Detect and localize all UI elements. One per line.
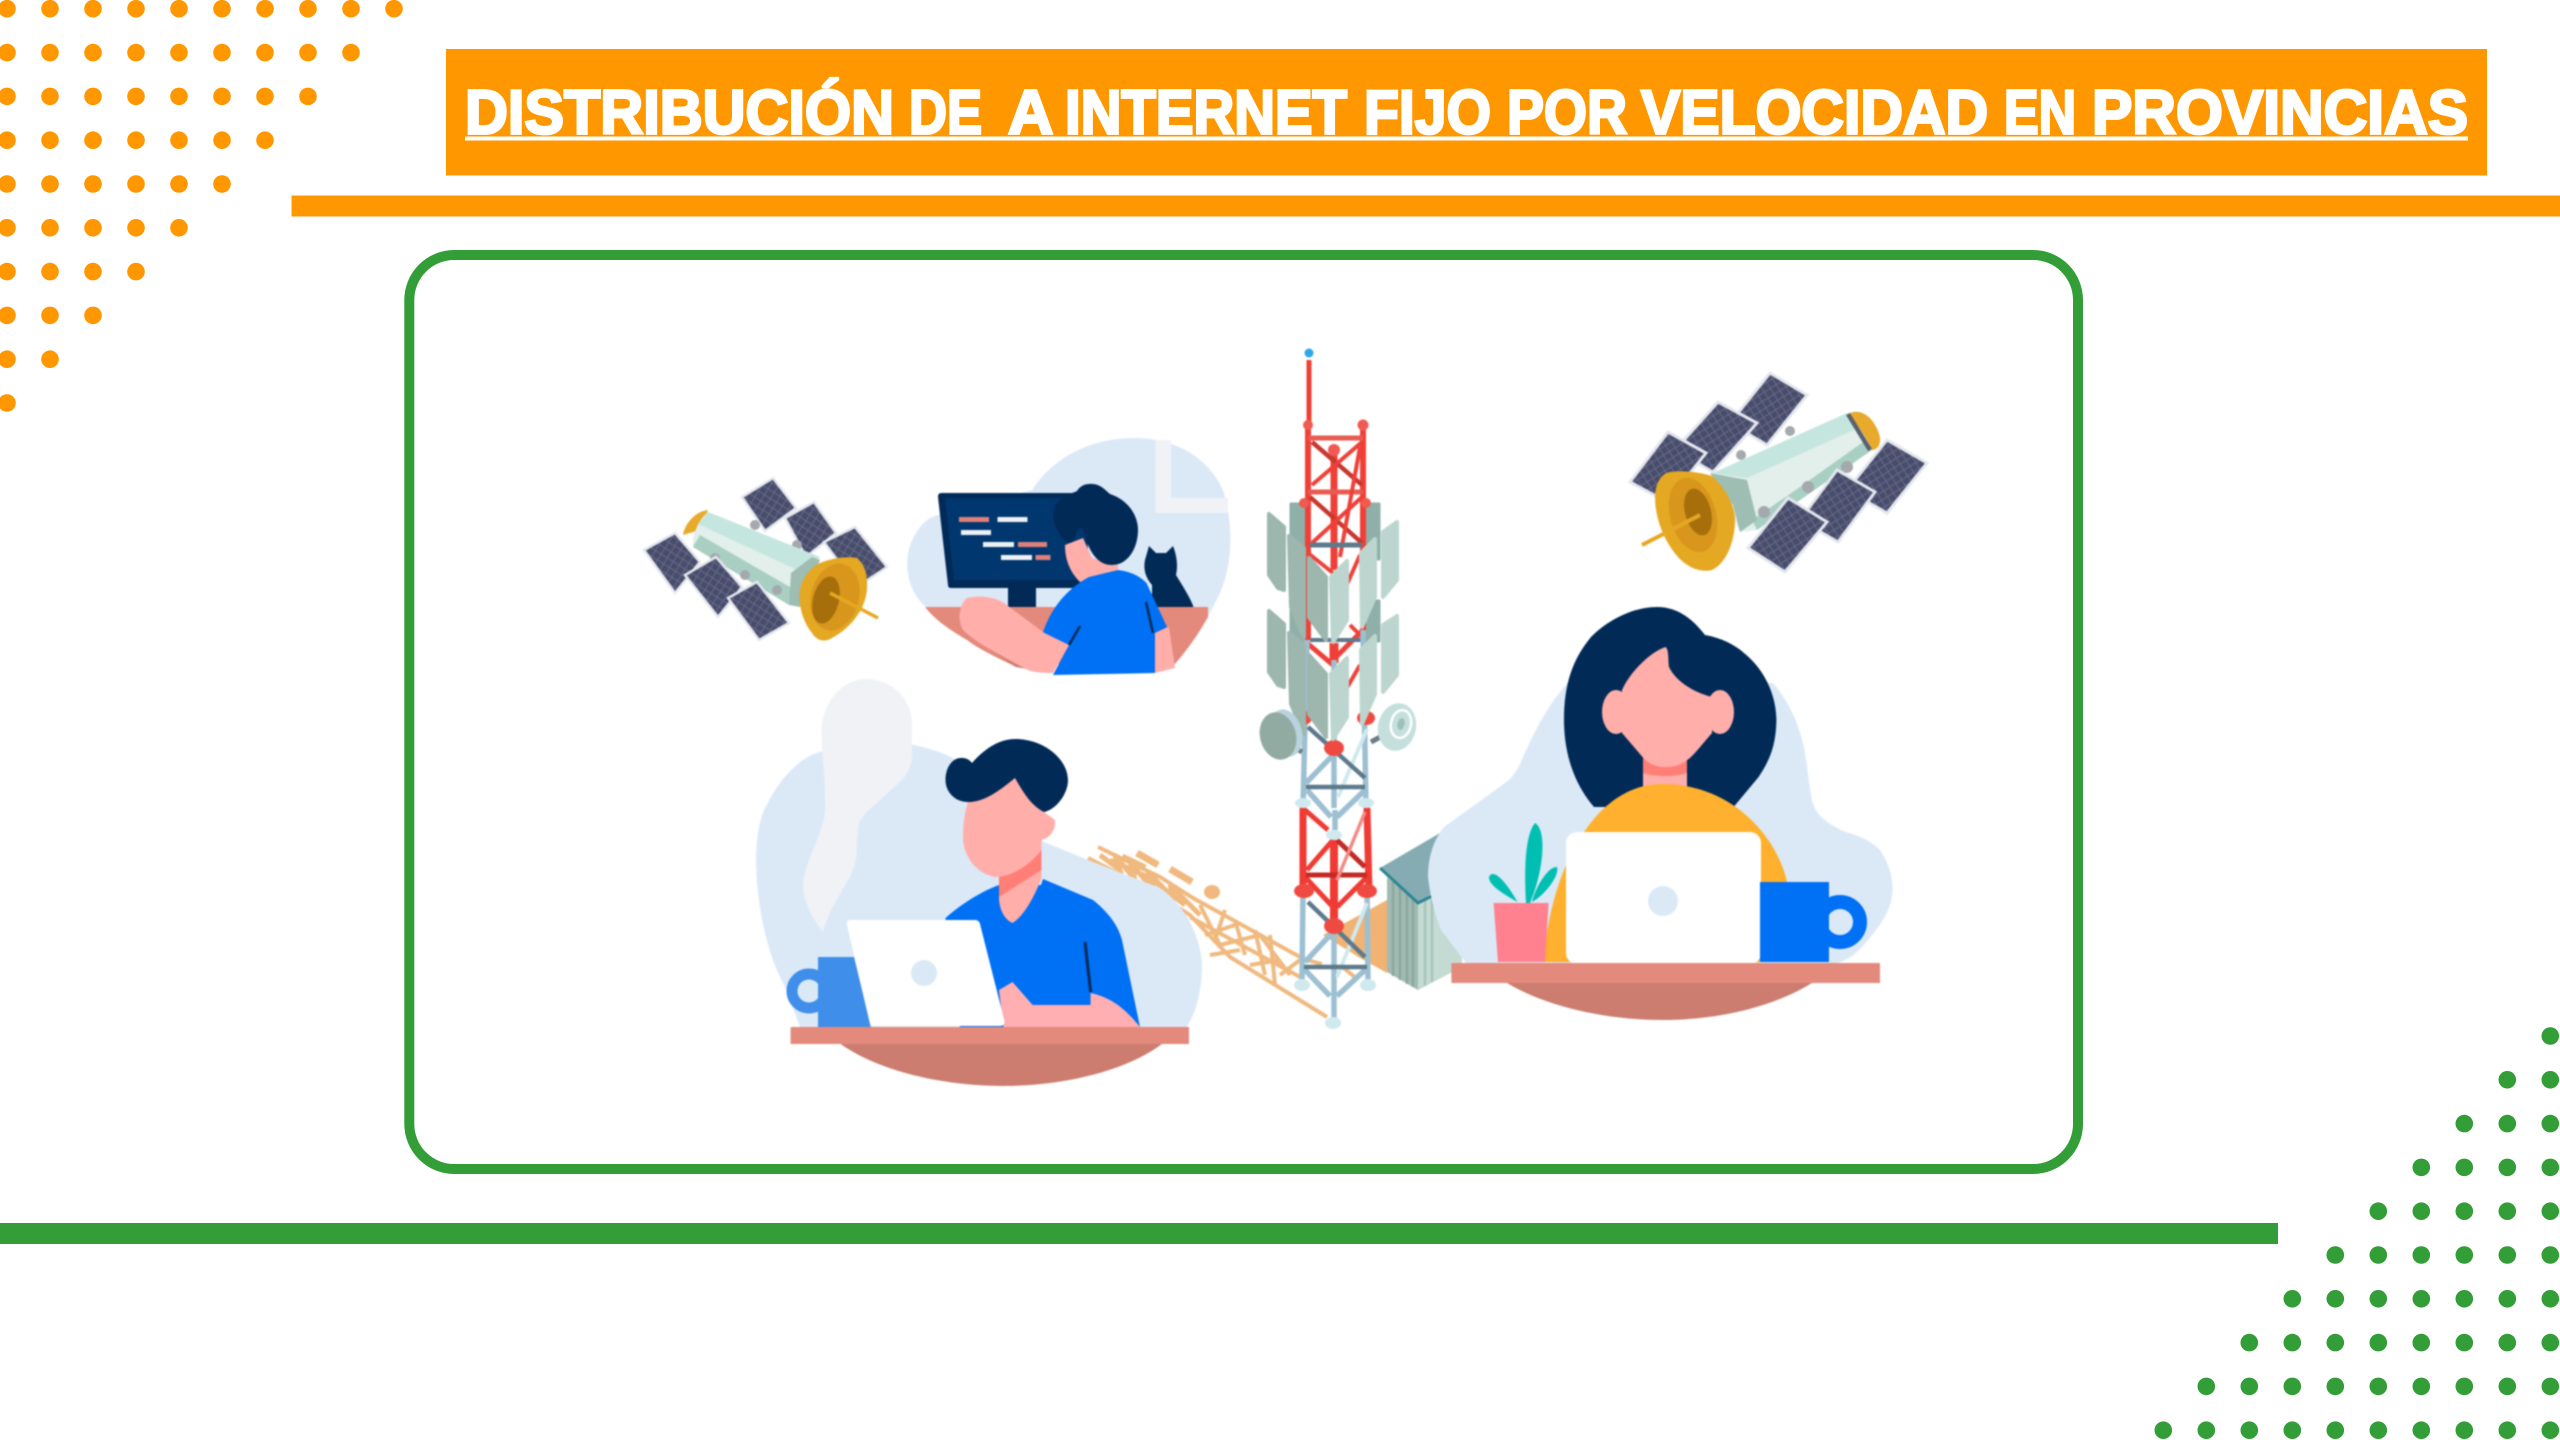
title banner: VELOCIDAD [1641, 78, 1988, 148]
hair [946, 739, 1068, 812]
panel: illustration frame [409, 255, 2078, 1169]
lower tower legs [1302, 630, 1368, 1022]
mug [792, 957, 871, 1027]
desk [925, 607, 1208, 667]
neck [1643, 755, 1687, 787]
steam [803, 679, 912, 932]
title banner: EN [2004, 78, 2076, 148]
green divider bar [0, 1223, 2278, 1244]
torso [945, 879, 1140, 1027]
mug [1760, 882, 1860, 962]
window frame [1156, 440, 1228, 513]
neck [999, 843, 1042, 923]
orange divider bar [292, 196, 2560, 216]
dish antenna right [1371, 700, 1421, 754]
icon: communication tower [1255, 348, 1421, 1029]
scene: woman with laptop [1428, 607, 1893, 1020]
face [1602, 647, 1734, 767]
building [1380, 826, 1462, 990]
title banner: FIJO [1364, 78, 1491, 148]
icon: satellite left [644, 478, 887, 641]
sweater [1544, 784, 1787, 962]
icon: cat [1144, 546, 1194, 607]
upper red lattice [1307, 425, 1365, 700]
face [963, 778, 1055, 877]
laptop [1566, 832, 1761, 964]
dish antenna left [1255, 706, 1307, 764]
title banner: INTERNET [1065, 78, 1347, 148]
desk [791, 1027, 1189, 1086]
antenna tip [1304, 348, 1314, 358]
laptop [847, 920, 1005, 1026]
illustration: connectivity scene [644, 348, 1927, 1086]
scene: man with laptop [756, 679, 1202, 1086]
desk [1451, 963, 1880, 1020]
title banner: DE [909, 78, 982, 148]
title banner: DISTRIBUCIÓN [465, 78, 894, 148]
middle red section [1303, 808, 1369, 925]
rear antenna panels [1291, 504, 1379, 641]
decorative orange dot grid top-left [7, 9, 396, 403]
person from behind [960, 484, 1175, 675]
decorative green dot grid bottom-right [2163, 1036, 2553, 1430]
title banner [446, 49, 2487, 176]
icon: satellite right [1630, 373, 1927, 572]
title banner: A [1008, 78, 1052, 148]
title banner: PROVINCIAS [2092, 78, 2468, 148]
shadow: orange tower shadow [1323, 900, 1387, 973]
monitor [938, 493, 1090, 607]
scene: developer at monitor [907, 438, 1230, 675]
title banner: POR [1507, 78, 1627, 148]
arm [999, 982, 1140, 1027]
antenna panels [1269, 514, 1397, 739]
icon: plant [1489, 823, 1557, 962]
shadow: fallen lattice [1088, 847, 1356, 1017]
tower joints [1294, 711, 1377, 934]
hair [1564, 607, 1776, 807]
